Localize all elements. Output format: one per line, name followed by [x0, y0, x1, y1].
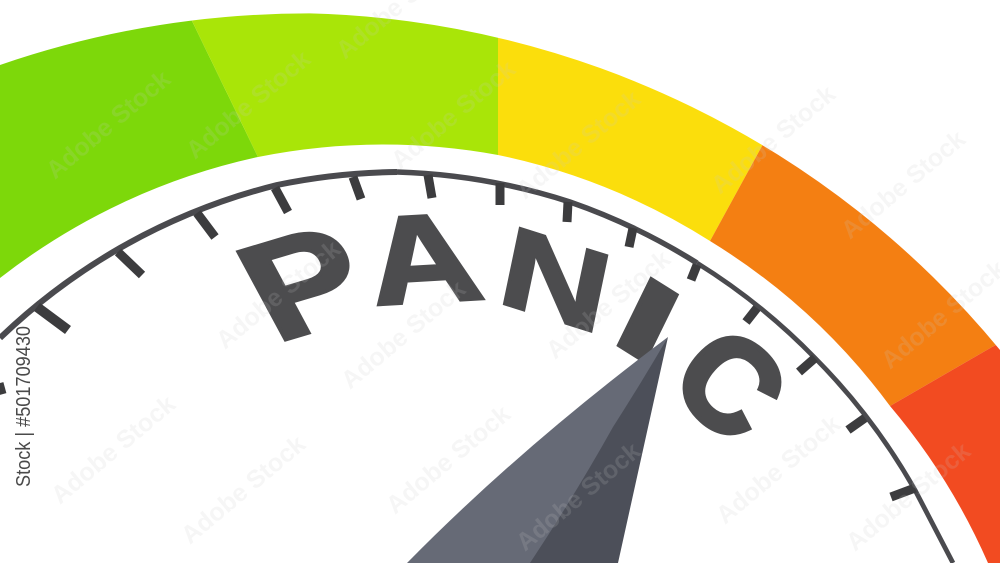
- segment: orange: [710, 145, 996, 406]
- tick marks: [0, 175, 915, 497]
- tick ring: [0, 172, 953, 563]
- title word: PANIC: I: [597, 251, 698, 390]
- segment: yellow: [498, 38, 762, 241]
- title word: PANIC: [213, 187, 814, 469]
- watermarks: Adobe Stock: [211, 235, 346, 355]
- segment: red: [890, 345, 1000, 563]
- title word: PANIC: A: [352, 187, 493, 332]
- title word: PANIC: C: [646, 298, 814, 469]
- title word: PANIC: N: [490, 202, 621, 358]
- title word: PANIC: P: [213, 196, 397, 371]
- stock id text: Stock | #501709430: [13, 326, 35, 487]
- needle: light face: [407, 337, 668, 563]
- watermarks: Adobe Stock: [181, 45, 316, 165]
- watermarks: Adobe Stock: [836, 125, 971, 245]
- watermarks: Adobe Stock: [841, 437, 976, 557]
- watermarks: Adobe Stock: [46, 390, 181, 510]
- segment: green: [0, 20, 258, 278]
- watermarks: Adobe Stock: [381, 400, 516, 520]
- watermarks: Adobe Stock: [541, 245, 676, 365]
- watermarks: Adobe Stock: [711, 410, 846, 530]
- segment: lime: [192, 13, 498, 157]
- watermarks: Adobe Stock: [511, 85, 646, 205]
- needle: dark face: [530, 337, 668, 563]
- watermarks: Adobe Stock: [386, 55, 521, 175]
- needle: [407, 337, 668, 563]
- watermarks: Adobe Stock: [176, 430, 311, 550]
- watermarks: Adobe Stock: [41, 65, 176, 185]
- watermarks: Adobe Stock: [336, 275, 471, 395]
- watermarks: Adobe Stock: [511, 437, 646, 557]
- watermarks: Adobe Stock: [706, 80, 841, 200]
